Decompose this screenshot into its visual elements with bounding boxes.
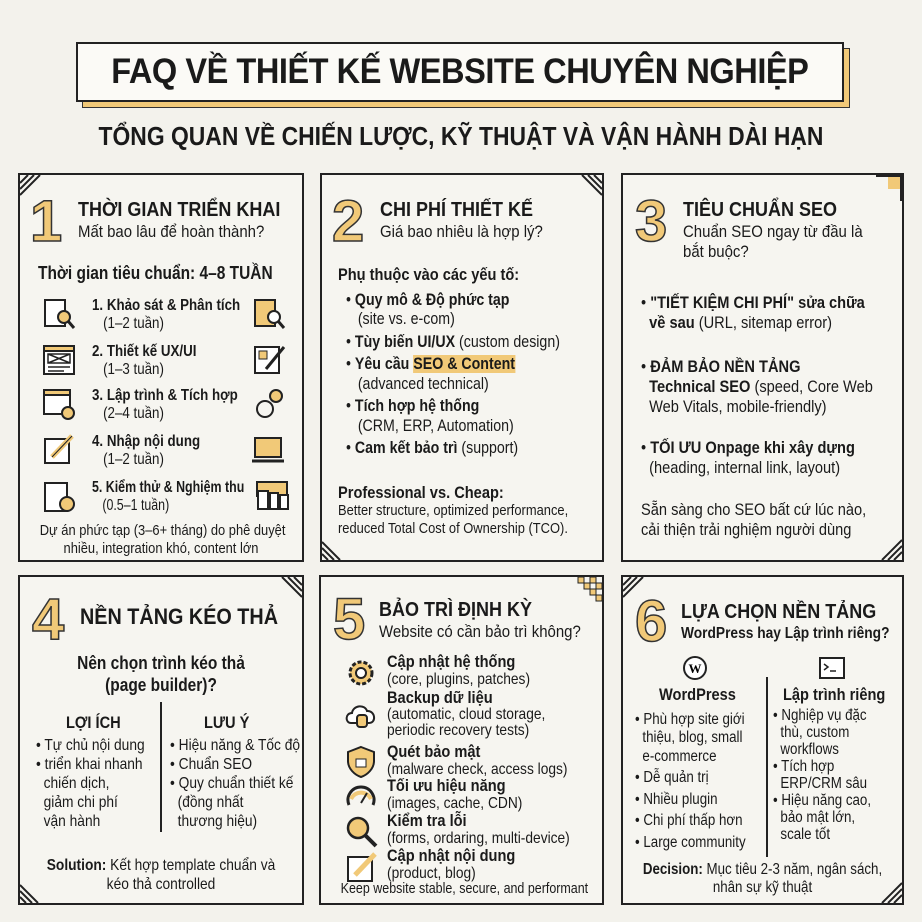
panel 1: thời gian triển khai: Mất bao lâu để hoàn thành? bbox=[78, 222, 264, 241]
panel 6: lựa chọn nền tảng: • Tích hợp bbox=[773, 758, 834, 775]
panel 4: nền tảng kéo thả: • Chuẩn SEO bbox=[170, 756, 252, 773]
panel 4: nền tảng kéo thả: chiến dịch, bbox=[44, 775, 109, 792]
panel 3: tiêu chuẩn SEO: về sau (URL, sitemap error) bbox=[649, 313, 832, 332]
panel 3: tiêu chuẩn SEO: TIÊU CHUẨN SEO bbox=[683, 199, 837, 221]
panel 3: tiêu chuẩn SEO: Technical SEO (speed, Core Web bbox=[649, 377, 873, 396]
panel 6: lựa chọn nền tảng: 6 bbox=[635, 589, 667, 654]
panel 2: chi phí thiết kế bbox=[320, 173, 604, 562]
panel 4: nền tảng kéo thả: giảm chi phí bbox=[44, 794, 118, 811]
panel 6: lựa chọn nền tảng: e-commerce bbox=[642, 748, 716, 765]
panel 6: lựa chọn nền tảng bbox=[621, 575, 904, 905]
panel 6: lựa chọn nền tảng: • Large community bbox=[635, 834, 746, 851]
maintenance list: Cập nhật nội dung bbox=[387, 846, 515, 865]
panel 3: tiêu chuẩn SEO: cải thiện trải nghiệm người dùng bbox=[641, 520, 851, 539]
step list: (2–4 tuần) bbox=[103, 405, 164, 422]
panel 6: lựa chọn nền tảng: • Dễ quản trị bbox=[635, 769, 709, 786]
maintenance list bbox=[346, 652, 570, 882]
step list: (1–2 tuần) bbox=[103, 451, 164, 468]
factor list: • Yêu cầu SEO & Content bbox=[346, 355, 515, 373]
panel 4: nền tảng kéo thả: (page builder)? bbox=[105, 675, 217, 695]
step list: (1–3 tuần) bbox=[103, 361, 164, 378]
panel 6: lựa chọn nền tảng: W bbox=[688, 661, 702, 676]
title banner: FAQ VỀ THIẾT KẾ WEBSITE CHUYÊN NGHIỆP bbox=[111, 52, 809, 91]
maintenance list: (forms, ordaring, multi-device) bbox=[387, 830, 570, 847]
panel 4: nền tảng kéo thả bbox=[18, 575, 304, 905]
factor list: (advanced technical) bbox=[358, 375, 489, 393]
step list: 1. Khảo sát & Phân tích bbox=[92, 297, 240, 314]
panel 4: nền tảng kéo thả: vận hành bbox=[44, 812, 100, 830]
maintenance list: (core, plugins, patches) bbox=[387, 671, 530, 688]
factor list: (CRM, ERP, Automation) bbox=[358, 417, 514, 435]
maintenance list: Tối ưu hiệu năng bbox=[387, 776, 506, 795]
maintenance list: Backup dữ liệu bbox=[387, 688, 493, 707]
panel 4: nền tảng kéo thả: LỢI ÍCH bbox=[66, 713, 121, 732]
factor list: • Tích hợp hệ thống bbox=[346, 397, 479, 415]
panel 4: nền tảng kéo thả: NỀN TẢNG KÉO THẢ bbox=[80, 604, 278, 629]
panel 4: nền tảng kéo thả: 4 bbox=[32, 587, 64, 652]
panel 6: lựa chọn nền tảng: nhân sự kỹ thuật bbox=[713, 879, 812, 896]
panel 4: nền tảng kéo thả: kéo thả controlled bbox=[107, 876, 215, 893]
panel 4: nền tảng kéo thả: Solution: Kết hợp template chuẩn và bbox=[47, 857, 275, 874]
panel 2: chi phí thiết kế: Giá bao nhiêu là hợp lý? bbox=[380, 222, 543, 241]
panel 3: tiêu chuẩn SEO: • "TIẾT KIỆM CHI PHÍ" sửa chữa bbox=[641, 293, 865, 312]
panel 1: thời gian triển khai: THỜI GIAN TRIỂN KHAI bbox=[78, 199, 280, 221]
panel 3: tiêu chuẩn SEO: Web Vitals, mobile-friendly) bbox=[649, 397, 827, 416]
panel 6: lựa chọn nền tảng: • Nhiều plugin bbox=[635, 791, 717, 808]
panel 2: chi phí thiết kế: Phụ thuộc vào các yếu tố: bbox=[338, 265, 519, 284]
panel 4: nền tảng kéo thả: thương hiệu) bbox=[178, 812, 257, 830]
panel 6: lựa chọn nền tảng: • Hiệu năng cao, bbox=[773, 792, 871, 809]
panel 3: tiêu chuẩn SEO: (heading, internal link, layout) bbox=[649, 458, 840, 477]
panel 6: lựa chọn nền tảng: bảo mật lớn, bbox=[780, 809, 855, 826]
panel 6: lựa chọn nền tảng: workflows bbox=[780, 741, 839, 758]
panel 6: lựa chọn nền tảng: scale tốt bbox=[780, 826, 830, 843]
panel 6: lựa chọn nền tảng: thiệu, blog, small bbox=[642, 729, 742, 746]
panel 5: bảo trì định kỳ: Keep website stable, secure, and performant bbox=[341, 881, 588, 897]
subtitle: TỔNG QUAN VỀ CHIẾN LƯỢC, KỸ THUẬT VÀ VẬN HÀNH DÀI HẠN bbox=[99, 121, 823, 151]
step list: (0.5–1 tuần) bbox=[102, 497, 169, 514]
panel 2: chi phí thiết kế: CHI PHÍ THIẾT KẾ bbox=[380, 199, 533, 221]
maintenance list: Quét bảo mật bbox=[387, 742, 480, 761]
panel 3: tiêu chuẩn SEO: • TỐI ƯU Onpage khi xây dựng bbox=[641, 438, 855, 457]
panel 6: lựa chọn nền tảng: • Phù hợp site giới bbox=[635, 711, 745, 728]
panel 4: nền tảng kéo thả: • Quy chuẩn thiết kế bbox=[170, 775, 293, 792]
panel 3: tiêu chuẩn SEO: 3 bbox=[635, 189, 667, 254]
step list: 3. Lập trình & Tích hợp bbox=[92, 387, 238, 404]
panel 4: nền tảng kéo thả: (đồng nhất bbox=[178, 794, 243, 811]
panel 4: nền tảng kéo thả: • Hiệu năng & Tốc độ bbox=[170, 737, 300, 754]
panel 2: chi phí thiết kế: Better structure, optimized performance, bbox=[338, 502, 568, 519]
factor list: • Tùy biến UI/UX (custom design) bbox=[346, 333, 560, 351]
panel 1: thời gian triển khai bbox=[18, 173, 304, 562]
panel 6: lựa chọn nền tảng: Decision: Mục tiêu 2-3 năm, ngân sách, bbox=[643, 861, 882, 878]
note: nhiều, integration khó, content lớn bbox=[64, 540, 258, 557]
maintenance list: (automatic, cloud storage, bbox=[387, 706, 545, 723]
panel 4: nền tảng kéo thả: LƯU Ý bbox=[204, 713, 249, 732]
factor list: • Quy mô & Độ phức tạp bbox=[346, 291, 509, 309]
panel 4: nền tảng kéo thả: • triển khai nhanh bbox=[36, 756, 143, 773]
factor list: • Cam kết bảo trì (support) bbox=[346, 439, 518, 457]
panel 2: chi phí thiết kế: 2 bbox=[332, 189, 364, 254]
panel 6: lựa chọn nền tảng: ERP/CRM sâu bbox=[780, 775, 867, 792]
panel 6: lựa chọn nền tảng: • Nghiệp vụ đặc bbox=[773, 707, 867, 724]
factor list bbox=[346, 291, 560, 457]
panel 2: chi phí thiết kế: reduced Total Cost of Ownership (TCO). bbox=[338, 520, 568, 537]
maintenance list: Kiểm tra lỗi bbox=[387, 811, 467, 830]
maintenance list: Cập nhật hệ thống bbox=[387, 652, 515, 671]
step list bbox=[43, 297, 289, 514]
panel 6: lựa chọn nền tảng: WordPress hay Lập trình riêng? bbox=[681, 625, 889, 642]
panel 6: lựa chọn nền tảng: LỰA CHỌN NỀN TẢNG bbox=[681, 601, 876, 623]
panel 1: thời gian triển khai: 1 bbox=[30, 189, 62, 254]
panel 6: lựa chọn nền tảng: thù, custom bbox=[780, 724, 849, 741]
maintenance list: (malware check, access logs) bbox=[387, 761, 567, 778]
step list: 5. Kiểm thử & Nghiệm thu bbox=[92, 479, 244, 496]
note: Dự án phức tạp (3–6+ tháng) do phê duyệt bbox=[40, 522, 285, 539]
panel 3: tiêu chuẩn SEO: • ĐẢM BẢO NỀN TẢNG bbox=[641, 357, 800, 376]
panel 4: nền tảng kéo thả: Nên chọn trình kéo thả bbox=[77, 653, 245, 673]
panel 5: bảo trì định kỳ: (product, blog) bbox=[387, 865, 476, 882]
maintenance list: periodic recovery tests) bbox=[387, 722, 529, 739]
step list: (1–2 tuần) bbox=[103, 315, 164, 332]
panel 3: tiêu chuẩn SEO: Sẵn sàng cho SEO bất cứ lúc nào, bbox=[641, 500, 866, 519]
panel 6: lựa chọn nền tảng: WordPress bbox=[659, 685, 736, 704]
step list: 2. Thiết kế UX/UI bbox=[92, 343, 196, 360]
maintenance list: (images, cache, CDN) bbox=[387, 795, 522, 812]
panel 3: tiêu chuẩn SEO: Chuẩn SEO ngay từ đầu là bbox=[683, 222, 863, 241]
panel 6: lựa chọn nền tảng: • Chi phí thấp hơn bbox=[635, 812, 743, 829]
factor list: (site vs. e-com) bbox=[358, 310, 455, 328]
panel 6: lựa chọn nền tảng: Lập trình riêng bbox=[783, 685, 885, 704]
panel 3: tiêu chuẩn SEO: bắt buộc? bbox=[683, 242, 749, 261]
panel 1: thời gian triển khai: Thời gian tiêu chuẩn: 4–8 TUẦN bbox=[38, 263, 273, 283]
panel 5: bảo trì định kỳ: Website có cần bảo trì không? bbox=[379, 622, 581, 641]
panel 4: nền tảng kéo thả: • Tự chủ nội dung bbox=[36, 737, 145, 754]
panel 5: bảo trì định kỳ bbox=[319, 575, 604, 905]
panel 5: bảo trì định kỳ: BẢO TRÌ ĐỊNH KỲ bbox=[379, 599, 532, 621]
panel 5: bảo trì định kỳ: 5 bbox=[333, 587, 365, 652]
note bbox=[40, 522, 286, 557]
title banner bbox=[76, 42, 850, 108]
panel 2: chi phí thiết kế: Professional vs. Cheap: bbox=[338, 483, 504, 502]
panel 3: tiêu chuẩn SEO bbox=[621, 173, 904, 562]
step list: 4. Nhập nội dung bbox=[92, 433, 200, 450]
